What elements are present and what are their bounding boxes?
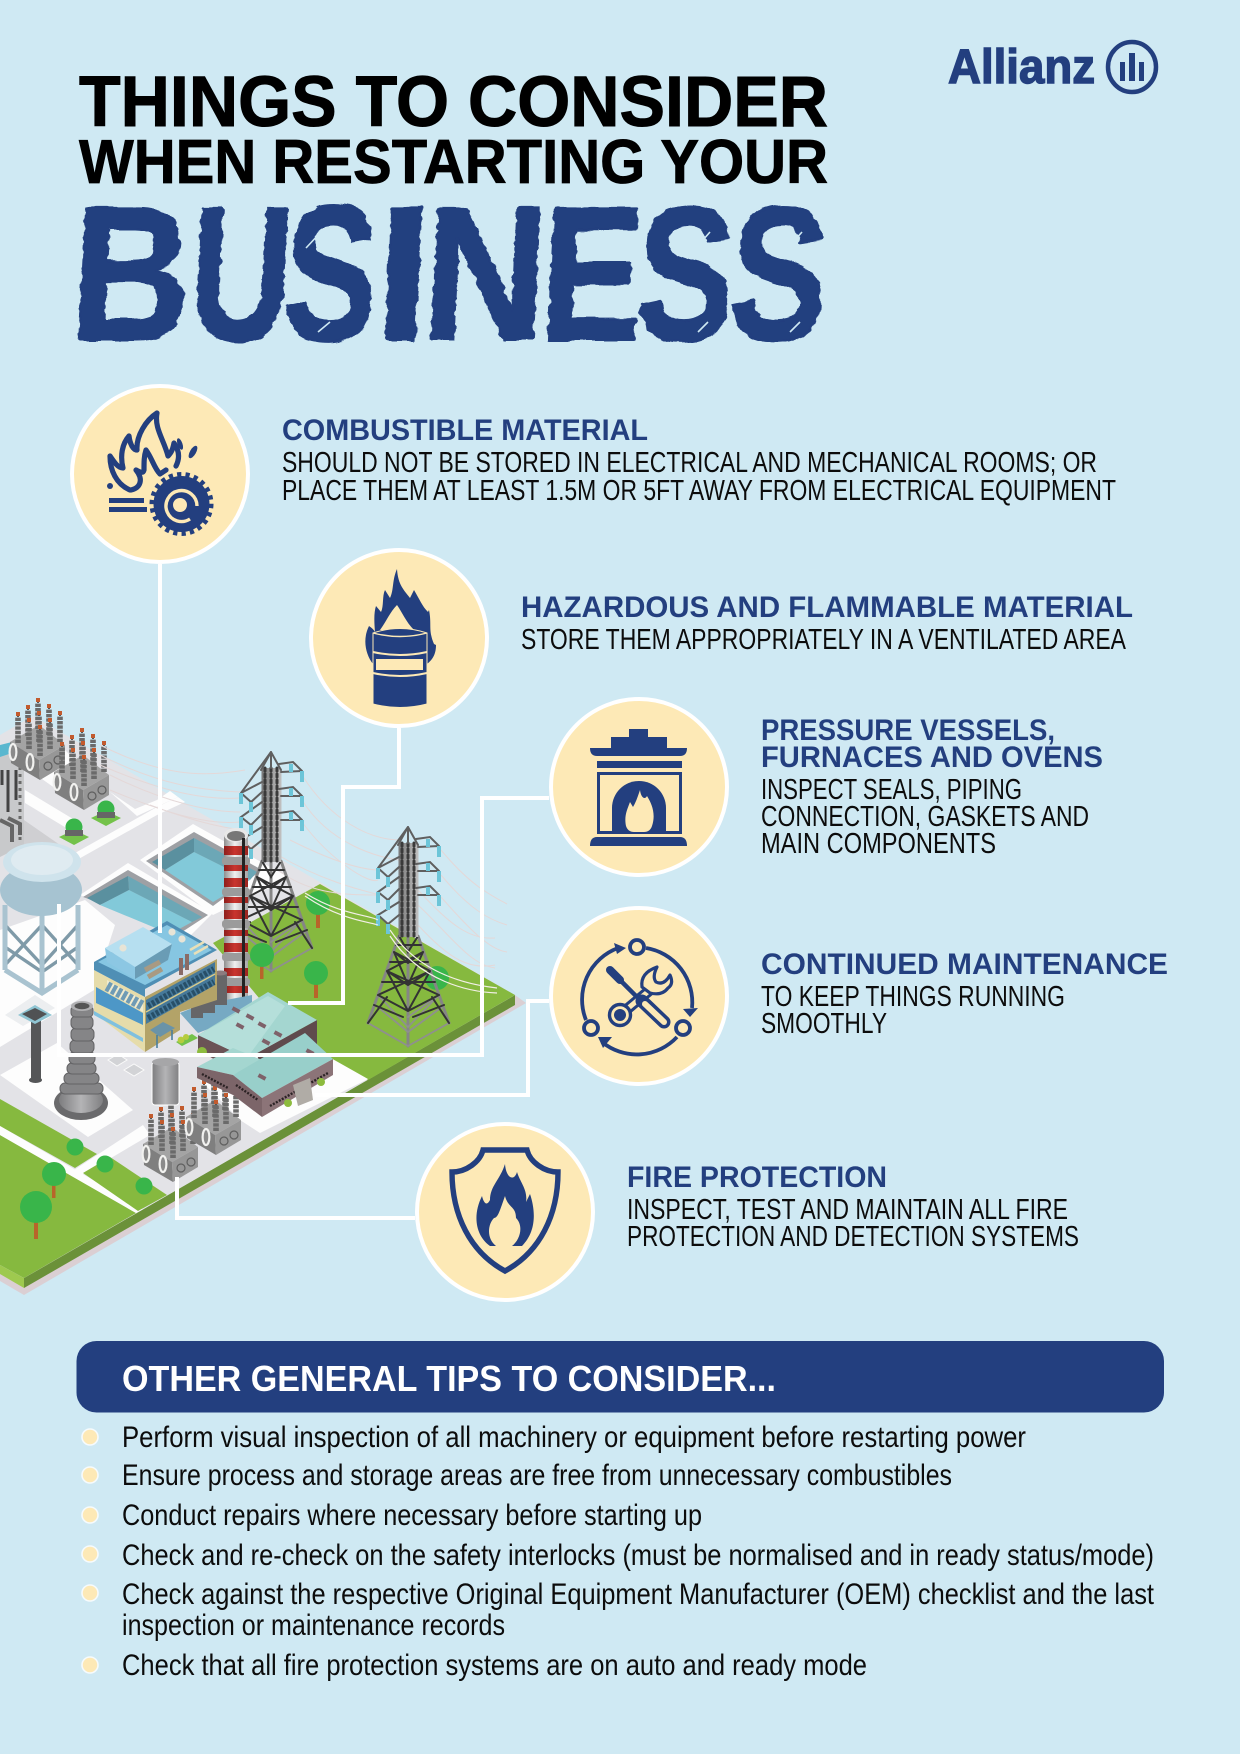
title: brush word business: U [185,166,298,381]
tip 2: Ensure process and storage areas are free from unnecessary combustibles [122,1459,952,1492]
tips list [82,1421,1155,1682]
icon: furnace [551,699,727,875]
ground plate [0,716,526,1295]
title: brush word business: E [536,166,649,381]
description: MAIN COMPONENTS [761,828,996,860]
icon: flame and gear [72,386,248,562]
heading: PRESSURE VESSELS, [761,714,1055,747]
description [282,447,1116,507]
description [761,774,1089,860]
warehouses [197,992,333,1117]
description: CONNECTION, GASKETS AND [761,801,1089,833]
icon: tools and cycle arrows [551,908,727,1084]
low white wires [305,893,497,993]
tip 5: inspection or maintenance records [122,1609,505,1642]
water tower [0,842,82,993]
item: continued maintenance [551,908,1168,1084]
description: SMOOTHLY [761,1008,887,1040]
title: THINGS TO CONSIDER [79,63,828,142]
title: brush word business: B [66,166,197,381]
logo: eagle mark [1108,42,1156,92]
tip 6: Check that all fire protection systems are on auto and ready mode [122,1649,867,1682]
transmission tower 1 [231,752,312,971]
illustration: isometric power plant [0,698,526,1295]
transmission tower 2 [368,827,449,1046]
heading: FURNACES AND OVENS [761,741,1103,774]
description: INSPECT, TEST AND MAINTAIN ALL FIRE [627,1194,1068,1226]
small ground units [108,1054,144,1076]
left building [0,742,24,857]
title: brush word business: S [632,166,740,381]
title: brush word business [66,166,833,381]
title: brush word business: S [725,166,833,381]
icon: burning barrel [311,550,487,726]
cylinder tank [152,1058,179,1105]
icon: shield with flame [417,1124,593,1300]
description [761,981,1065,1040]
title: WHEN RESTARTING YOUR [79,128,828,197]
connector lines [59,564,549,1218]
banner heading: OTHER GENERAL TIPS TO CONSIDER... [122,1358,776,1399]
trees behind tower [250,891,449,998]
logo: allianz: Allianz [948,41,1095,94]
title: brush word business: S [279,166,383,381]
white roads and pads [0,745,368,1175]
heading: CONTINUED MAINTENANCE [761,948,1168,981]
title [66,63,833,381]
transformers [10,698,241,1182]
heading: FIRE PROTECTION [627,1161,887,1194]
description: TO KEEP THINGS RUNNING [761,981,1065,1013]
cooling stack [54,1001,108,1120]
chimney [222,828,250,1010]
heading [761,714,1103,774]
water pool b [140,824,290,915]
tip 3: Conduct repairs where necessary before starting up [122,1499,702,1532]
item: hazardous and flammable material [311,550,1133,726]
water pool a [80,863,213,940]
title: brush word business: I [370,166,437,381]
heading: HAZARDOUS AND FLAMMABLE MATERIAL [521,591,1133,624]
item: fire protection [417,1124,1079,1300]
green domes [59,800,121,845]
description: PROTECTION AND DETECTION SYSTEMS [627,1221,1079,1253]
item: pressure vessels, furnaces and ovens [551,699,1103,875]
description: INSPECT SEALS, PIPING [761,774,1022,806]
lawn trees [20,1138,152,1239]
heading: COMBUSTIBLE MATERIAL [282,414,648,447]
panel: general tips banner [76,1341,1164,1412]
storage tanks [180,970,252,1033]
tip 1: Perform visual inspection of all machinery or equipment before restarting power [122,1421,1026,1454]
tip 5 [82,1578,1155,1642]
shadow beside left building [24,820,75,870]
description [627,1194,1079,1253]
item: combustible material [72,386,1116,562]
title: brush word business: N [418,166,553,381]
office building [94,921,217,1052]
lamp mast [5,995,55,1083]
lawns and roads lower left [0,1099,167,1278]
overhead wires [100,745,507,968]
